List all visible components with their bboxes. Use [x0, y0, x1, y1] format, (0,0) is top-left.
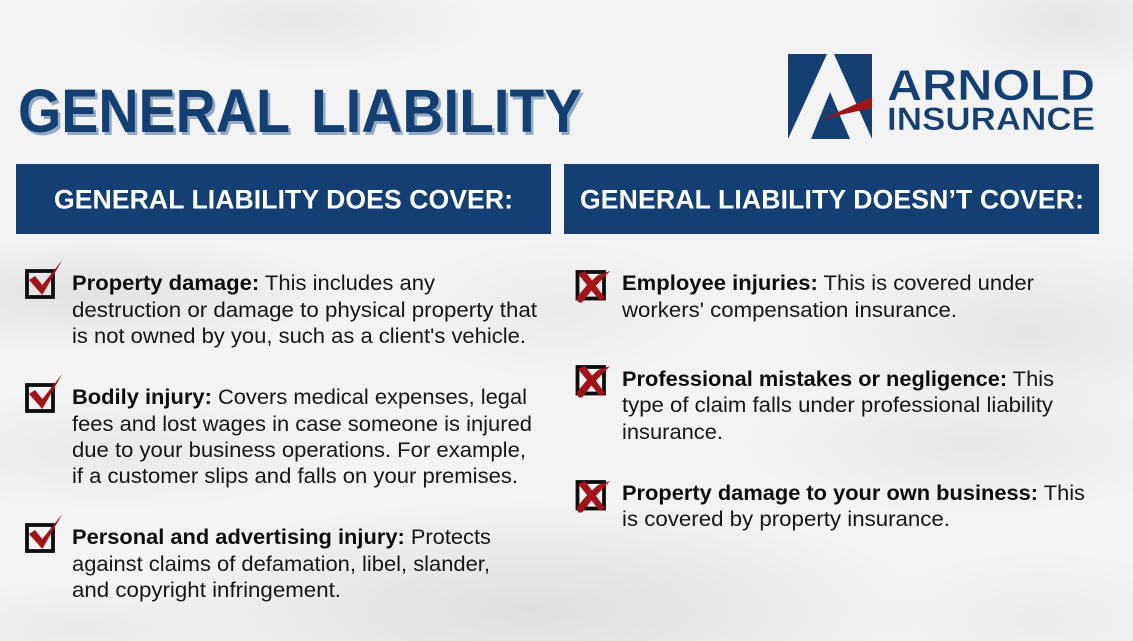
icon: check personal injury — [27, 514, 62, 551]
panel header: doesn't cover: GENERAL LIABILITY DOESN’T COVER: — [580, 184, 1084, 214]
icon: check bodily injury — [27, 374, 62, 411]
logo: Arnold Insurance — [788, 54, 1095, 139]
icon: check property damage — [27, 260, 62, 297]
text: employee injuries: Employee injuries: This is covered under — [622, 272, 1034, 295]
icon: cross own business property — [577, 481, 610, 513]
text: professional mistakes: type of claim falls under professional liability — [622, 394, 1054, 417]
text: own business property: Property damage to your own business: This — [622, 482, 1085, 505]
text: bodily injury: Bodily injury: Covers medical expenses, legal — [72, 386, 527, 409]
logo: Arnold Insurance: ARNOLD — [887, 61, 1095, 110]
text: bodily injury: due to your business operations. For example, — [72, 439, 526, 462]
text: employee injuries: workers' compensation insurance. — [621, 299, 957, 322]
text: personal and advertising injury: Personal and advertising injury: Protects — [72, 526, 491, 549]
text: bodily injury: if a customer slips and falls on your premises. — [72, 465, 518, 488]
panel header: does cover — [16, 164, 551, 234]
text: professional mistakes: insurance. — [622, 421, 723, 444]
panel header: does cover: GENERAL LIABILITY DOES COVER: — [54, 184, 513, 214]
title: GENERAL — [18, 77, 290, 145]
text: personal and advertising injury: and copyright infringement. — [72, 579, 341, 602]
text: own business property: is covered by property insurance. — [622, 508, 950, 531]
text: personal and advertising injury — [72, 526, 491, 602]
icon: cross employee injuries — [577, 271, 610, 303]
logo: Arnold Insurance: INSURANCE — [887, 101, 1095, 137]
title — [18, 77, 584, 148]
text: bodily injury: fees and lost wages in case someone is injured — [72, 413, 532, 436]
text: property damage: Property damage: This includes any — [72, 272, 436, 295]
panel header: doesn't cover — [564, 164, 1099, 234]
text: property damage — [72, 272, 537, 348]
text: property damage: is not owned by you, such as a client's vehicle. — [72, 325, 526, 348]
text: professional mistakes — [622, 368, 1054, 444]
title: LIABILITY — [311, 77, 582, 145]
text: property damage: destruction or damage to physical property that — [72, 299, 537, 322]
icon: cross professional mistakes — [577, 366, 610, 398]
title: LIABILITY — [314, 80, 584, 148]
title: GENERAL — [20, 80, 292, 148]
text: personal and advertising injury: against claims of defamation, libel, slander, — [72, 553, 490, 576]
text: own business property — [622, 482, 1085, 531]
text: bodily injury — [72, 386, 532, 488]
text: professional mistakes: Professional mistakes or negligence: This — [622, 368, 1054, 391]
text: employee injuries — [621, 272, 1034, 322]
